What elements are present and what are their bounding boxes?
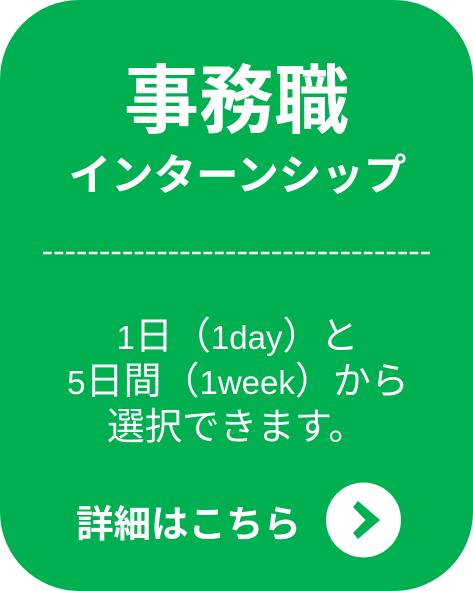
- subtitle: インターンシップ: [69, 153, 406, 200]
- title: 事務職: [124, 59, 349, 143]
- dashed divider: [43, 252, 430, 254]
- text block: description: 1日（1day）と: [117, 316, 358, 358]
- text block: description: 選択できます。: [107, 406, 366, 448]
- text block: description: [67, 316, 409, 448]
- text block: description: 5日間（1week）から: [67, 361, 409, 403]
- icon: arrow button: [326, 482, 401, 558]
- link label: 詳細はこちら: [76, 503, 301, 545]
